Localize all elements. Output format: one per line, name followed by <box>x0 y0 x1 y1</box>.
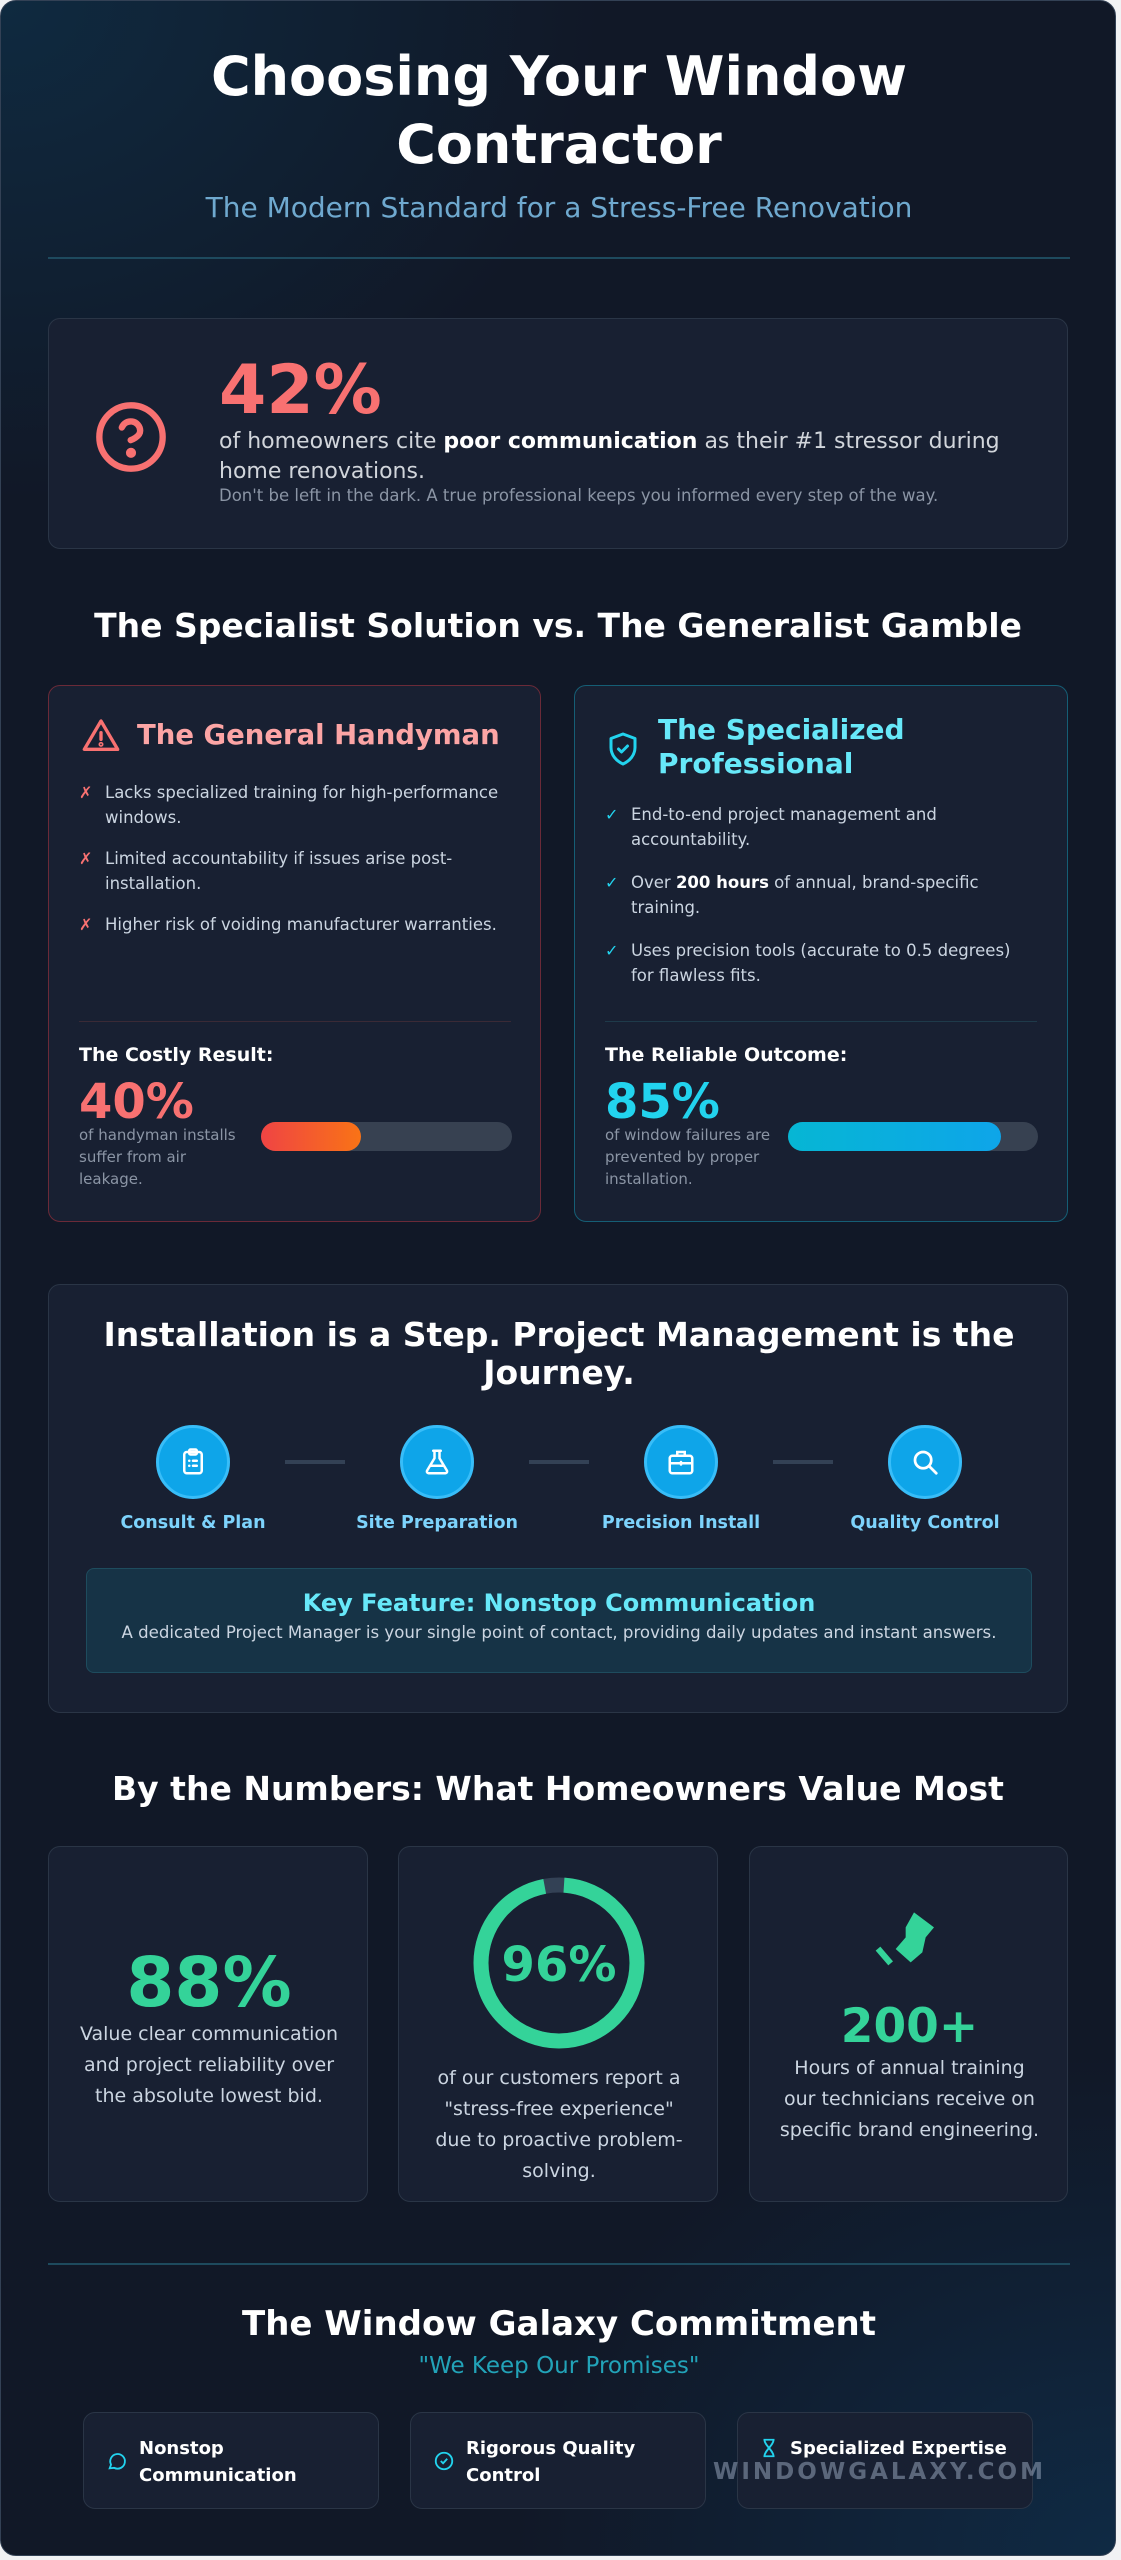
stat note: Don't be left in the dark. A true professional keeps you informed every step of the way. <box>219 486 938 505</box>
list <box>79 783 498 934</box>
stat text: of homeowners cite poor communication as their #1 stressor during home renovations. <box>219 429 1000 484</box>
step: install: Precision Install <box>602 1513 760 1533</box>
icon: warning <box>82 719 120 751</box>
result label: The Reliable Outcome: <box>605 1044 847 1066</box>
heading <box>658 713 905 780</box>
heading: Installation is a Step. Project Management is the Journey. <box>104 1315 1014 1392</box>
card: 96% ring: of our customers report a "stress-free experience" due to proactive problem-solving. <box>435 2067 683 2182</box>
callout: key feature <box>86 1568 1032 1673</box>
heading: numbers: By the Numbers: What Homeowners Value Most <box>112 1769 1004 1808</box>
list: Over 200 hours of annual, brand-specific training. <box>631 873 979 917</box>
list: Uses precision tools (accurate to 0.5 degrees) for flawless fits. <box>631 941 1010 985</box>
list: ✗ <box>79 915 92 934</box>
card: 200+: Hours of annual training <box>794 2057 1025 2079</box>
panel: process <box>48 1284 1068 1713</box>
pill: communication <box>83 2412 379 2509</box>
result text: of handyman installs suffer from air leakage. <box>79 1126 236 1188</box>
step: quality: Quality Control <box>850 1513 1000 1533</box>
pill: quality: Control <box>466 2465 540 2486</box>
list <box>605 805 1010 985</box>
bar: 40% <box>261 1122 512 1151</box>
bar: 85% <box>788 1122 1038 1151</box>
callout: key feature: A dedicated Project Manager is your single point of contact, providing daily updates and instant answers. <box>122 1623 996 1642</box>
subtitle: The Modern Standard for a Stress-Free Renovation <box>206 191 912 224</box>
list: ✓ <box>605 805 618 824</box>
stat number: 42% <box>219 351 382 430</box>
pill: communication: Nonstop <box>139 2438 224 2459</box>
pill: expertise: Specialized Expertise <box>790 2438 1007 2459</box>
title: Choosing Your Window <box>211 45 907 108</box>
card: 96% ring <box>398 1846 718 2202</box>
card: 96% ring: 96% <box>502 1937 616 1993</box>
icon: hammer <box>876 1912 934 1966</box>
heading: The Specialized <box>658 713 905 746</box>
card: 88%: 88% <box>126 1943 292 2023</box>
title <box>211 45 907 176</box>
card: 88%: Value clear communication and project reliability over the absolute lowest bid. <box>80 2023 338 2107</box>
panel: general handyman <box>48 685 541 1222</box>
watermark: WINDOWGALAXY.COM <box>713 2459 1046 2485</box>
list: ✓ <box>605 941 618 960</box>
list: ✗ <box>79 849 92 868</box>
panel: 42% stat <box>48 318 1068 549</box>
step: site prep <box>356 1425 518 1533</box>
pill: quality <box>410 2412 706 2509</box>
step: consult: Consult & Plan <box>120 1513 266 1533</box>
list: End-to-end project management and accountability. <box>631 805 937 849</box>
step: quality <box>850 1425 1000 1533</box>
list: Higher risk of voiding manufacturer warranties. <box>105 915 497 934</box>
pill: communication: Communication <box>139 2465 297 2486</box>
pill: expertise <box>737 2412 1033 2509</box>
list: ✓ <box>605 873 618 892</box>
result number: 40% <box>79 1074 194 1130</box>
card: 200+: our technicians receive on specific brand engineering. <box>780 2088 1039 2141</box>
card: 200+ <box>749 1846 1068 2202</box>
result number: 85% <box>605 1074 720 1130</box>
panel: specialized professional <box>574 685 1068 1222</box>
heading: Professional <box>658 747 853 780</box>
result label: The Costly Result: <box>79 1044 273 1066</box>
step: site prep: Site Preparation <box>356 1513 518 1533</box>
list: Limited accountability if issues arise post-installation. <box>105 849 452 893</box>
list: ✗ <box>79 783 92 802</box>
icon: shield <box>610 732 636 766</box>
subtitle: promises: "We Keep Our Promises" <box>418 2353 700 2379</box>
title: Contractor <box>396 113 722 176</box>
step: install <box>602 1425 760 1533</box>
heading: The General Handyman <box>137 719 500 751</box>
heading: commitment: The Window Galaxy Commitment <box>242 2304 876 2344</box>
pill: quality: Rigorous Quality <box>466 2438 635 2459</box>
step: consult <box>120 1425 266 1533</box>
icon: question circle <box>96 402 166 472</box>
card: 200+: 200+ <box>841 1999 978 2054</box>
list: Lacks specialized training for high-performance windows. <box>105 783 498 827</box>
card: 88% <box>48 1846 368 2202</box>
heading: comparison: The Specialist Solution vs. The Generalist Gamble <box>94 606 1022 645</box>
callout: key feature: Key Feature: Nonstop Communication <box>303 1589 815 1617</box>
result text: of window failures are prevented by proper installation. <box>605 1126 770 1188</box>
